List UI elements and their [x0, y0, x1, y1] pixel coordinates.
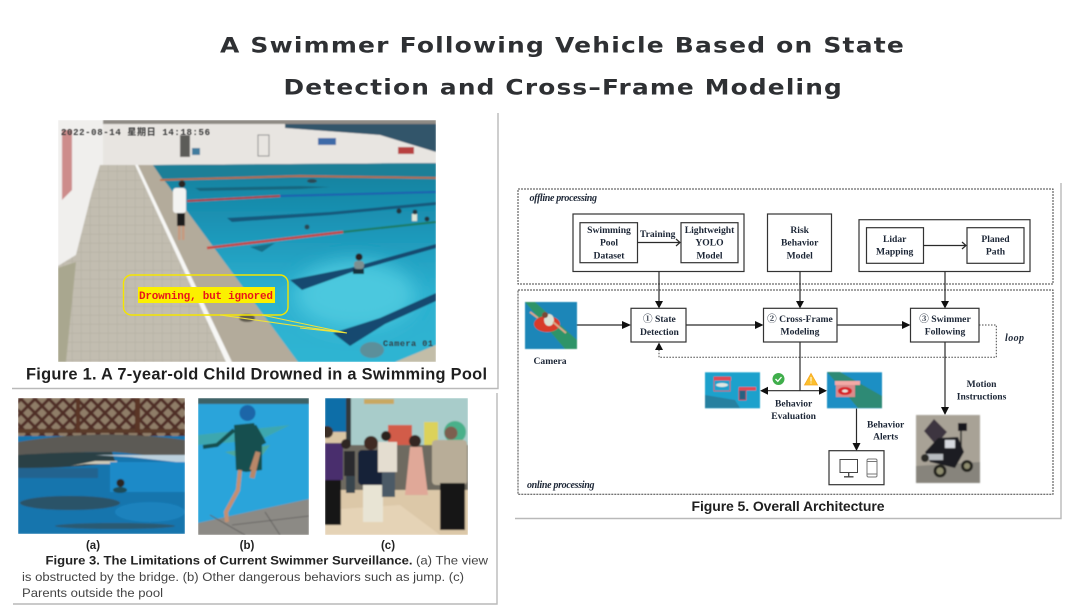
group: dataset and YOLO: Dataset — [594, 250, 625, 261]
caption: figure 5: Figure 5. Overall Architecture — [692, 498, 885, 514]
figure 3 sublabels: (c) — [381, 540, 395, 552]
box: state detection: ① State — [643, 314, 677, 325]
title: Detection and Cross–Frame Modeling — [284, 76, 843, 100]
box: cross-frame modeling: ② Cross-Frame — [767, 314, 834, 325]
image: safe behavior detection — [705, 372, 760, 408]
panel: figure 3 — [13, 393, 497, 604]
photo b: jumping child — [198, 398, 309, 535]
caption: figure 1: Figure 1. A 7-year-old Child Drowned in a Swimming Pool — [26, 366, 487, 384]
box: state detection — [631, 308, 686, 342]
caption: figure 3: is obstructed by the bridge. (b) Other dangerous behaviors such as jump. (c) — [22, 570, 464, 584]
icon: warning — [804, 374, 818, 385]
label: behavior alerts: Behavior — [867, 419, 905, 430]
icon: phone — [867, 459, 877, 477]
caption: figure 3: Parents outside the pool — [22, 586, 163, 600]
photo: drowning in swimming pool — [58, 120, 436, 362]
box: risk behavior model: Behavior — [781, 238, 819, 249]
figure 3 sublabels: (a) — [86, 540, 100, 552]
box: swimmer following: ③ Swimmer — [919, 314, 971, 325]
box: alert devices — [829, 451, 884, 485]
label: motion instructions: Motion — [967, 379, 997, 390]
label: behavior evaluation: Evaluation — [771, 411, 817, 422]
caption: figure 3: (a) The view — [416, 554, 488, 568]
title — [220, 34, 905, 100]
caption: figure 3 — [22, 554, 488, 600]
icon: check — [772, 373, 784, 385]
group: dataset and YOLO: YOLO — [695, 238, 724, 249]
photo c: parents outside pool — [321, 398, 468, 535]
panel: offline processing: offline processing — [530, 193, 597, 204]
label: behavior evaluation: Behavior — [775, 398, 813, 409]
timestamp: 2022-08-14 星期日 14:18:56 — [61, 126, 210, 138]
group: lidar mapping and path: Mapping — [876, 247, 914, 258]
label: motion instructions — [957, 379, 1007, 403]
panel: online processing — [518, 272, 1053, 494]
panel: figure 5 overall architecture — [515, 183, 1061, 518]
group: dataset and YOLO — [573, 214, 744, 272]
title: A Swimmer Following Vehicle Based on State — [220, 34, 905, 58]
panel: figure 1 — [12, 113, 498, 388]
label: behavior alerts: Alerts — [873, 432, 898, 443]
box: risk behavior model: Model — [787, 250, 813, 261]
group: lidar mapping and path: Path — [986, 247, 1006, 258]
camera label: Camera 01 — [383, 339, 433, 349]
label: loop: loop — [1005, 333, 1024, 344]
icon: monitor — [840, 460, 858, 477]
group: dataset and YOLO: Training — [640, 229, 676, 240]
box: swimmer following: Following — [925, 327, 965, 338]
label: motion instructions: Instructions — [957, 392, 1007, 403]
group: dataset and YOLO: Model — [696, 250, 723, 261]
caption: figure 3: Figure 3. The Limitations of Current Swimmer Surveillance. — [46, 554, 412, 568]
image: risky behavior detection — [827, 372, 882, 408]
callout: drowning, but ignored: Drowning, but ignored — [139, 291, 273, 303]
group: dataset and YOLO: Pool — [600, 238, 618, 249]
group: dataset and YOLO: Swimming — [587, 225, 631, 236]
box: cross-frame modeling — [764, 308, 837, 342]
photo a: bridge obstruction — [18, 398, 185, 534]
group: lidar mapping and path — [859, 220, 1030, 272]
image: robot vehicle — [916, 415, 980, 483]
image: camera view — [525, 302, 577, 349]
figure 3 sublabels: (b) — [240, 540, 255, 552]
box: swimmer following — [910, 308, 979, 342]
panel: online processing: online processing — [527, 480, 594, 491]
group: lidar mapping and path: Lidar — [883, 234, 907, 245]
figure 3 sublabels — [86, 540, 395, 552]
panel: offline processing — [518, 189, 1053, 284]
label: behavior evaluation — [771, 398, 817, 422]
label: behavior alerts — [867, 419, 905, 443]
box: cross-frame modeling: Modeling — [781, 327, 820, 338]
box: risk behavior model: Risk — [790, 225, 810, 236]
group: lidar mapping and path: Planed — [981, 234, 1010, 245]
connectors — [576, 272, 996, 451]
callout: drowning, but ignored — [124, 275, 347, 333]
label: camera: Camera — [533, 356, 567, 367]
box: state detection: Detection — [640, 327, 680, 338]
box: risk behavior model — [768, 214, 832, 272]
group: dataset and YOLO: Lightweight — [685, 225, 735, 236]
